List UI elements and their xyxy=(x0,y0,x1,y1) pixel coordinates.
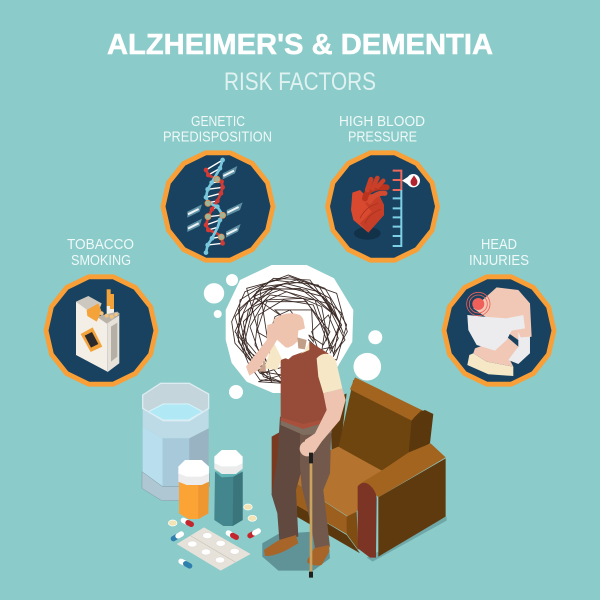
title: ALZHEIMER'S & DEMENTIA xyxy=(107,29,493,61)
thought bubble xyxy=(226,265,353,393)
scribble tangle xyxy=(232,275,347,383)
label: genetic predisposition: PREDISPOSITION xyxy=(163,130,272,146)
vest xyxy=(281,342,330,429)
old man with cane xyxy=(246,313,346,578)
icon: cigarette pack xyxy=(76,289,120,372)
head xyxy=(273,313,309,359)
subtitle: RISK FACTORS xyxy=(224,68,376,96)
label: head injuries: HEAD xyxy=(481,237,517,253)
raised arm and hand xyxy=(246,322,282,376)
pills and capsules xyxy=(168,504,258,566)
trousers xyxy=(272,417,332,548)
thought bubbles: small circles xyxy=(204,274,382,399)
label: high blood pressure: PRESSURE xyxy=(348,130,417,146)
label: tobacco smoking xyxy=(67,237,134,269)
label: genetic predisposition: GENETIC xyxy=(191,114,245,130)
panel: tobacco smoking medallion xyxy=(44,274,158,387)
icon: blood pressure scale xyxy=(393,171,420,246)
label: head injuries: INJURIES xyxy=(469,253,529,269)
panel: high blood pressure medallion xyxy=(325,150,440,263)
label: tobacco smoking: TOBACCO xyxy=(67,237,134,253)
shoes xyxy=(264,535,329,565)
arm holding cane xyxy=(300,388,346,456)
panel: genetic predisposition medallion xyxy=(160,150,276,263)
icon: heart xyxy=(351,178,387,240)
teal pill bottle xyxy=(214,450,243,526)
armchair xyxy=(272,377,447,562)
label: head injuries xyxy=(469,237,529,269)
blister pack xyxy=(177,527,251,571)
icon: DNA helix xyxy=(187,158,243,255)
label: genetic predisposition xyxy=(163,114,272,146)
label: high blood pressure xyxy=(339,114,425,146)
panel: head injuries medallion xyxy=(442,274,556,387)
label: high blood pressure: HIGH BLOOD xyxy=(339,114,425,130)
water glass xyxy=(142,383,209,501)
orange pill bottle xyxy=(178,460,209,519)
label: tobacco smoking: SMOKING xyxy=(71,253,131,269)
cane xyxy=(309,453,313,578)
sleeve xyxy=(317,354,342,393)
icon: bandaged head xyxy=(467,287,532,376)
floor shadow xyxy=(262,532,330,571)
